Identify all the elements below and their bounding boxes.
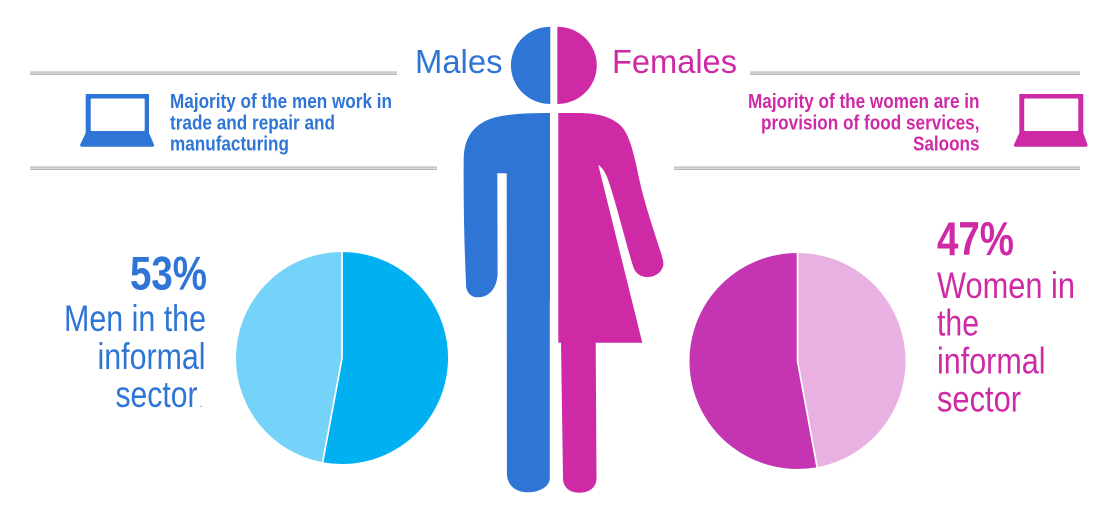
stat: 47% women [937, 212, 1075, 420]
slice: 47% [798, 252, 906, 468]
female head [557, 27, 597, 104]
stat: 53% men: 53% [130, 246, 207, 300]
female body and dress [558, 113, 663, 493]
text: men's work: Majority of the men work in [170, 91, 392, 113]
stat: 47% women: informal [937, 340, 1046, 382]
male head [511, 27, 550, 104]
pie chart: women [689, 252, 906, 470]
icon: magenta laptop [1014, 94, 1088, 147]
text: men's work: trade and repair and [170, 112, 335, 134]
text: men's work: manufacturing [170, 134, 289, 156]
slice: 53% [322, 251, 449, 465]
text: women's work: Majority of the women are in [748, 91, 980, 113]
stat: 47% women: Women in [937, 264, 1075, 306]
male body [464, 113, 550, 492]
slice: 53% [689, 252, 817, 470]
stat: 53% men [64, 246, 207, 415]
pie chart: men [235, 251, 449, 465]
text: women's work: Saloons [913, 134, 980, 156]
stat: 47% women: 47% [937, 212, 1014, 265]
stat: 53% men: sector [116, 373, 198, 415]
stat: 47% women: the [937, 302, 979, 344]
figure: male half [464, 27, 550, 492]
heading: Males: Males [415, 44, 502, 81]
stat: 47% women: sector [937, 378, 1021, 420]
text: men's work [170, 91, 392, 156]
text: women's work [748, 91, 980, 156]
heading: Females: Females [612, 44, 737, 81]
text: women's work: provision of food services, [761, 112, 980, 134]
stat: 53% men: Men in the [64, 297, 206, 339]
slice: 47% [235, 251, 342, 463]
icon: blue laptop [80, 94, 154, 147]
stat: 53% men: informal [98, 335, 206, 377]
stat: 53% men: . [200, 399, 202, 410]
figure: female half [557, 27, 663, 493]
